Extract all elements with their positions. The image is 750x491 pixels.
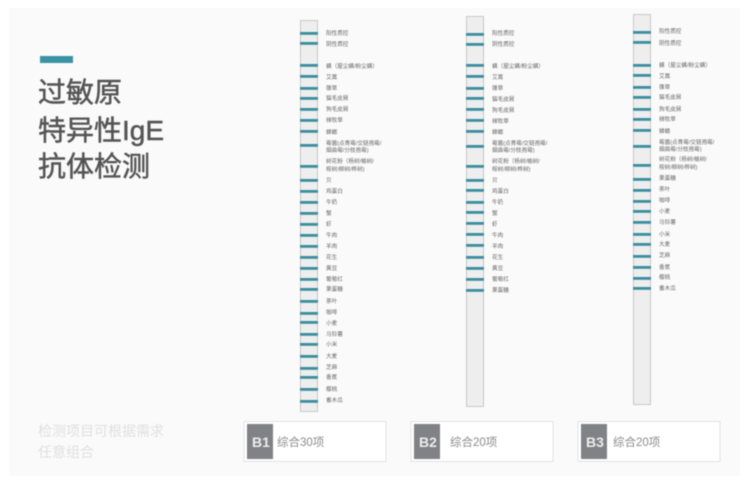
labels B2: 葡萄红 [492,275,509,283]
labels B1: 梯牧草 [326,116,343,124]
card: B3 [578,422,720,462]
labels B1: 马铃薯 [326,330,343,338]
labels B3: 咖啡 [659,196,671,204]
labels B1: 小麦 [326,319,338,327]
title: 特异性IgE [38,115,164,146]
labels B1: 牛肉 [326,231,338,239]
labels B1: 蟹 [326,209,332,217]
labels B2 [492,29,548,294]
labels B2: 鸡蛋白 [492,187,509,195]
labels B3: 桉树/柳树/桦树) [659,163,698,171]
labels B1: 阴性质控 [326,40,349,48]
labels B1: 蟑螂 [326,128,338,136]
bands B2 [466,33,484,292]
labels B1: 艾蒿 [326,73,338,81]
labels B2: 阴性质控 [492,40,515,48]
labels B3: 芝麻 [659,251,671,259]
labels B2: 蟹 [492,209,498,217]
labels B3: 茶叶 [659,185,671,193]
labels B3: 阳性质控 [659,27,682,35]
labels B3: 阴性质控 [659,39,682,47]
labels B1: 桉树/柳树/桦树) [326,165,365,173]
strip body B2 [466,16,484,406]
labels B3: 狗毛皮屑 [659,105,681,113]
labels B3: 霉菌(点青霉/交链孢霉/ [659,138,715,146]
labels B2: 烟曲霉/分枝孢霉) [492,146,535,154]
labels B3: 树花粉（杨树/榆树/ [659,155,707,163]
labels B1: 番木瓜 [326,396,343,404]
labels B1: 螨（屋尘螨/粉尘螨） [326,62,378,70]
strip body B1 [300,20,318,412]
bands B1 [300,32,318,403]
labels B3: 螨（屋尘螨/粉尘螨） [659,61,711,69]
labels B2: 狗毛皮屑 [492,106,514,114]
labels B1: 香蕉 [326,373,338,381]
labels B2: 葎草 [492,84,504,92]
card: B2: 综合20项 [450,435,498,449]
card: B2 [411,422,553,462]
labels B3: 艾蒿 [659,72,671,80]
labels B3: 小米 [659,230,671,238]
labels B1: 霉菌(点青霉/交链孢霉/ [326,139,382,147]
card: B3: B3 [586,434,604,450]
labels B1: 虾 [326,220,332,228]
labels B3: 樱桃 [659,273,671,281]
labels B2: 霉菌(点青霉/交链孢霉/ [492,139,548,147]
labels B2: 阳性质控 [492,29,515,37]
labels B1: 花生 [326,253,338,261]
title accent bar [40,56,73,63]
labels B2: 虾 [492,220,498,228]
card: B2: B2 [419,434,437,450]
labels B2: 果蛋糖 [492,286,509,294]
card: B1 [244,422,386,462]
labels B3: 香蕉 [659,263,671,271]
labels B2: 花生 [492,253,504,261]
note: customizable combination: 检测项目可根据需求 [38,423,164,439]
labels B2: 树花粉（杨树/榆树/ [492,157,540,165]
labels B1: 阳性质控 [326,29,349,37]
labels B1: 狗毛皮屑 [326,105,348,113]
bands B3 [633,31,651,290]
labels B2: 贝 [492,177,498,184]
labels B1: 芝麻 [326,363,338,371]
card: B1: 综合30项 [277,435,325,449]
labels B3 [659,27,715,292]
card: B1: B1 [252,434,270,450]
panel: B2 test strip [466,16,548,406]
labels B3: 烟曲霉/分枝孢霉) [659,145,702,153]
labels B1: 咖啡 [326,308,338,316]
labels B1: 树花粉（杨树/榆树/ [326,157,374,165]
panel: B3 test strip [633,14,715,404]
labels B1 [326,29,382,404]
strip body B3 [634,14,650,404]
labels B3: 马铃薯 [659,218,676,226]
labels B1: 大麦 [326,352,338,360]
labels B2: 黄豆 [492,264,504,272]
labels B3: 果蛋糖 [659,174,676,182]
labels B1: 贝 [326,177,332,184]
title: 抗体检测 [38,151,150,182]
labels B1: 葡萄红 [326,275,343,283]
labels B1: 烟曲霉/分枝孢霉) [326,146,369,154]
labels B2: 艾蒿 [492,73,504,81]
labels B1: 牛奶 [326,198,338,206]
labels B2: 桉树/柳树/桦树) [492,165,531,173]
title: 过敏原 [38,77,122,108]
labels B2: 梯牧草 [492,117,509,125]
labels B2: 牛奶 [492,198,504,206]
labels B3: 大麦 [659,240,671,248]
labels B3: 梯牧草 [659,115,676,123]
labels B1: 樱桃 [326,385,338,393]
labels B2: 猫毛皮屑 [492,95,514,103]
labels B1: 猫毛皮屑 [326,94,348,102]
title [38,77,164,182]
labels B1: 果蛋糖 [326,285,343,293]
labels B1: 葎草 [326,84,338,92]
note: customizable combination: 任意组合 [38,444,94,460]
labels B1: 小米 [326,340,338,348]
panel: B1 test strip [300,20,382,412]
labels B3: 番木瓜 [659,284,676,292]
labels B2: 牛肉 [492,231,504,239]
labels B2: 蟑螂 [492,128,504,136]
labels B3: 小麦 [659,207,671,215]
labels B3: 蟑螂 [659,127,671,135]
card: B3: 综合20项 [613,435,661,449]
labels B2: 螨（屋尘螨/粉尘螨） [492,62,544,70]
note: customizable combination [38,423,164,460]
labels B3: 猫毛皮屑 [659,93,681,101]
labels B1: 黄豆 [326,264,338,272]
labels B2: 羊肉 [492,242,504,250]
labels B1: 羊肉 [326,242,338,250]
labels B3: 葎草 [659,83,671,91]
labels B1: 茶叶 [326,297,338,305]
labels B1: 鸡蛋白 [326,187,343,195]
